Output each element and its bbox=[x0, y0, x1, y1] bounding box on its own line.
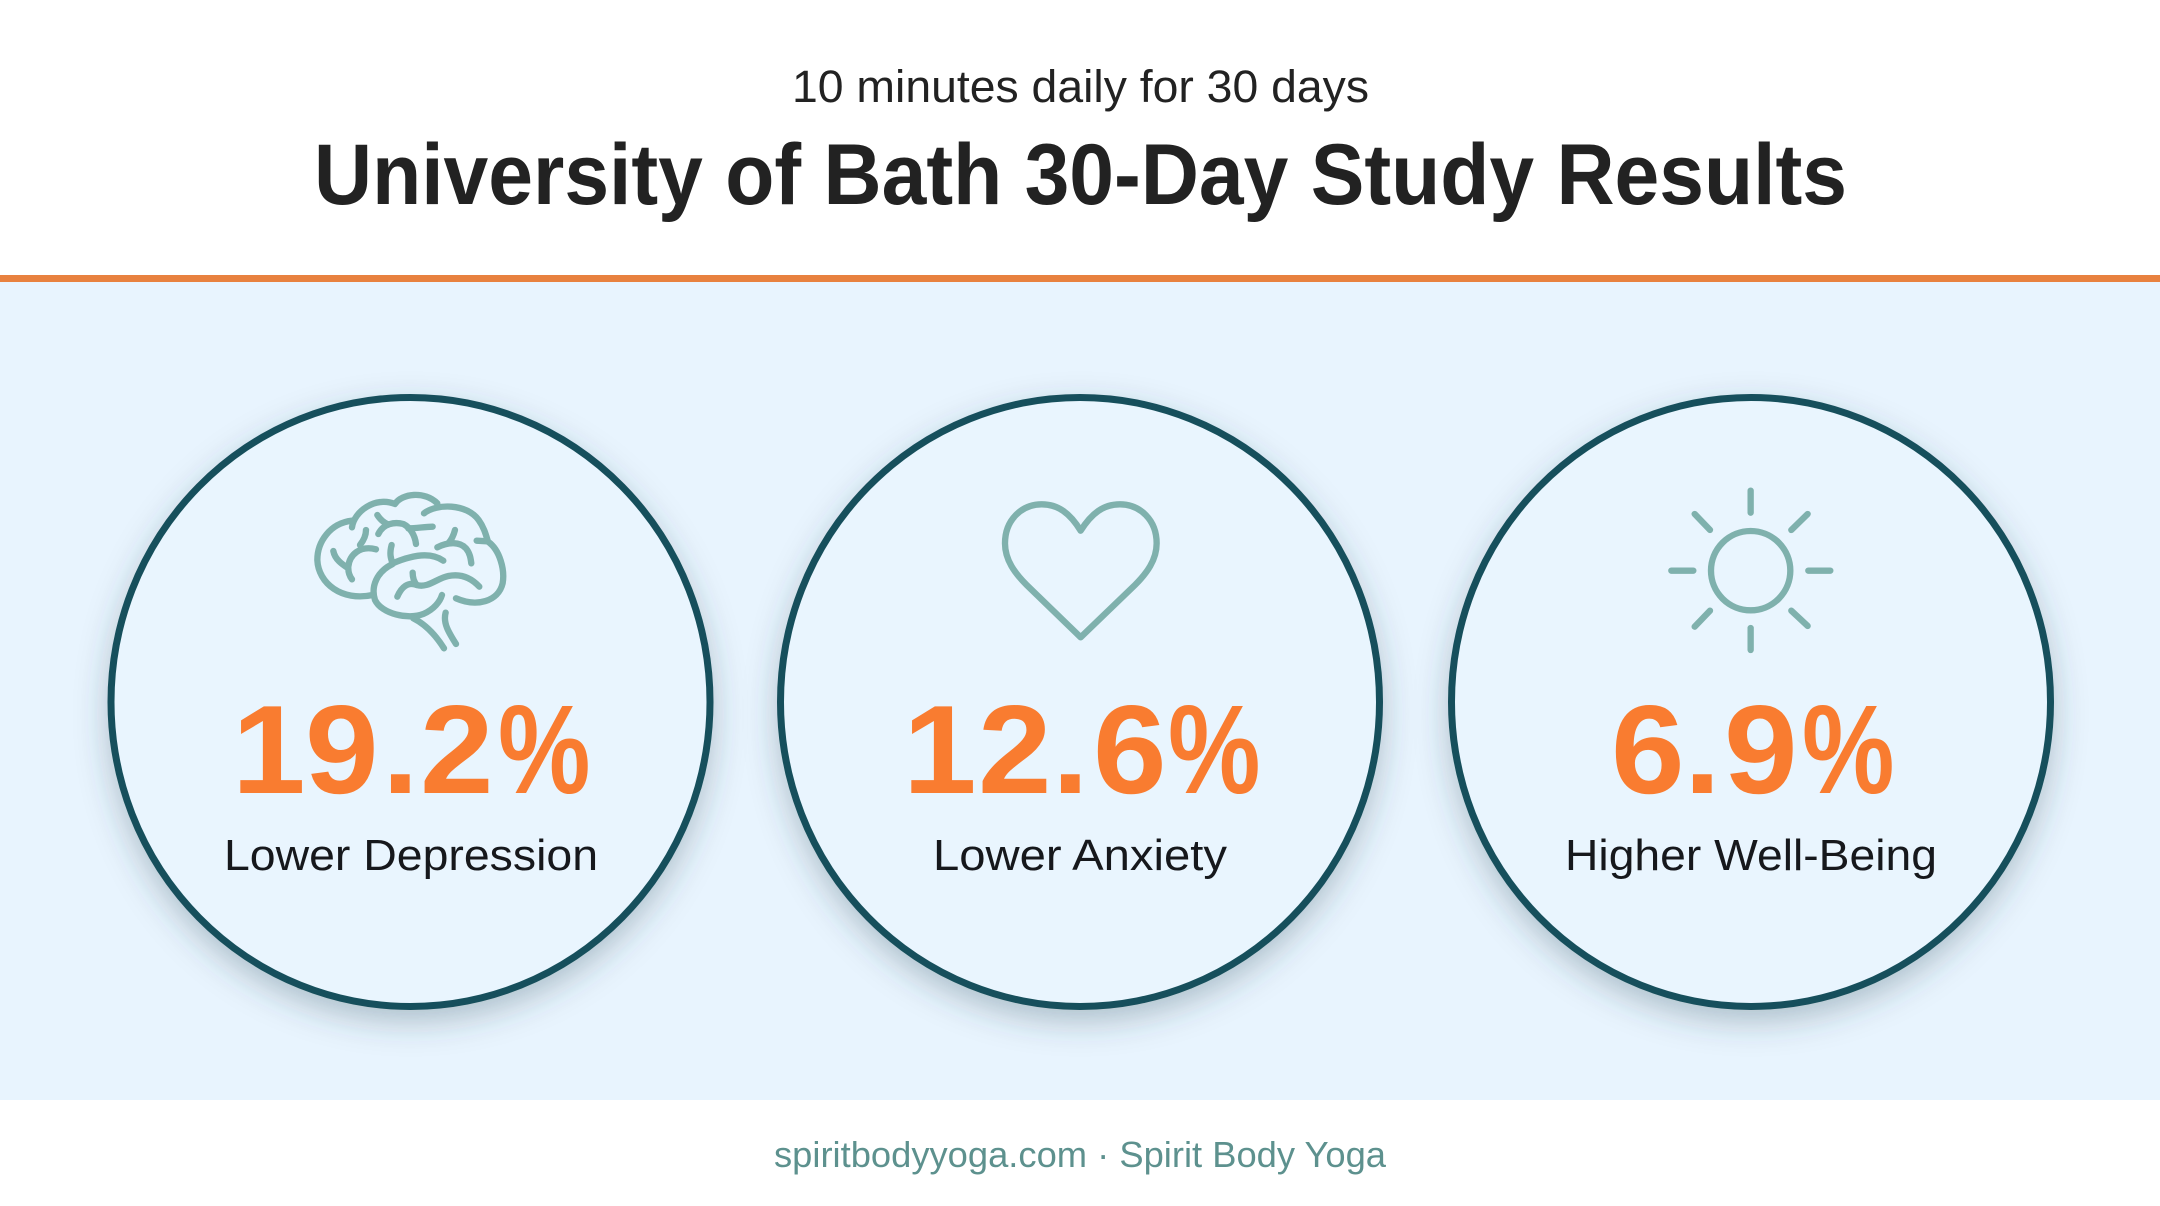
label: Lower Depression bbox=[224, 831, 598, 880]
label: Higher Well-Being bbox=[1565, 831, 1937, 880]
stat bbox=[870, 687, 1370, 817]
icon: brain bbox=[317, 495, 503, 648]
orange divider bbox=[0, 275, 2160, 282]
circle ring bbox=[111, 398, 710, 1006]
icon: heart bbox=[1005, 504, 1157, 637]
panel: lower depression bbox=[111, 398, 710, 1006]
label: Lower Anxiety bbox=[933, 831, 1227, 880]
subtitle: 10 minutes daily for 30 days bbox=[792, 61, 1369, 112]
stat bbox=[200, 687, 700, 817]
circle ring bbox=[780, 398, 1380, 1006]
icon: sun bbox=[1671, 491, 1830, 650]
title: University of Bath 30-Day Study Results bbox=[314, 127, 1847, 223]
panel: higher well-being bbox=[1452, 398, 2090, 1006]
stat bbox=[1590, 687, 2090, 817]
circle ring bbox=[1452, 398, 2050, 1006]
panel: background band bbox=[0, 282, 2160, 1100]
panel: lower anxiety bbox=[780, 398, 1380, 1006]
footer credit: spiritbodyyoga.com · Spirit Body Yoga bbox=[774, 1134, 1387, 1175]
